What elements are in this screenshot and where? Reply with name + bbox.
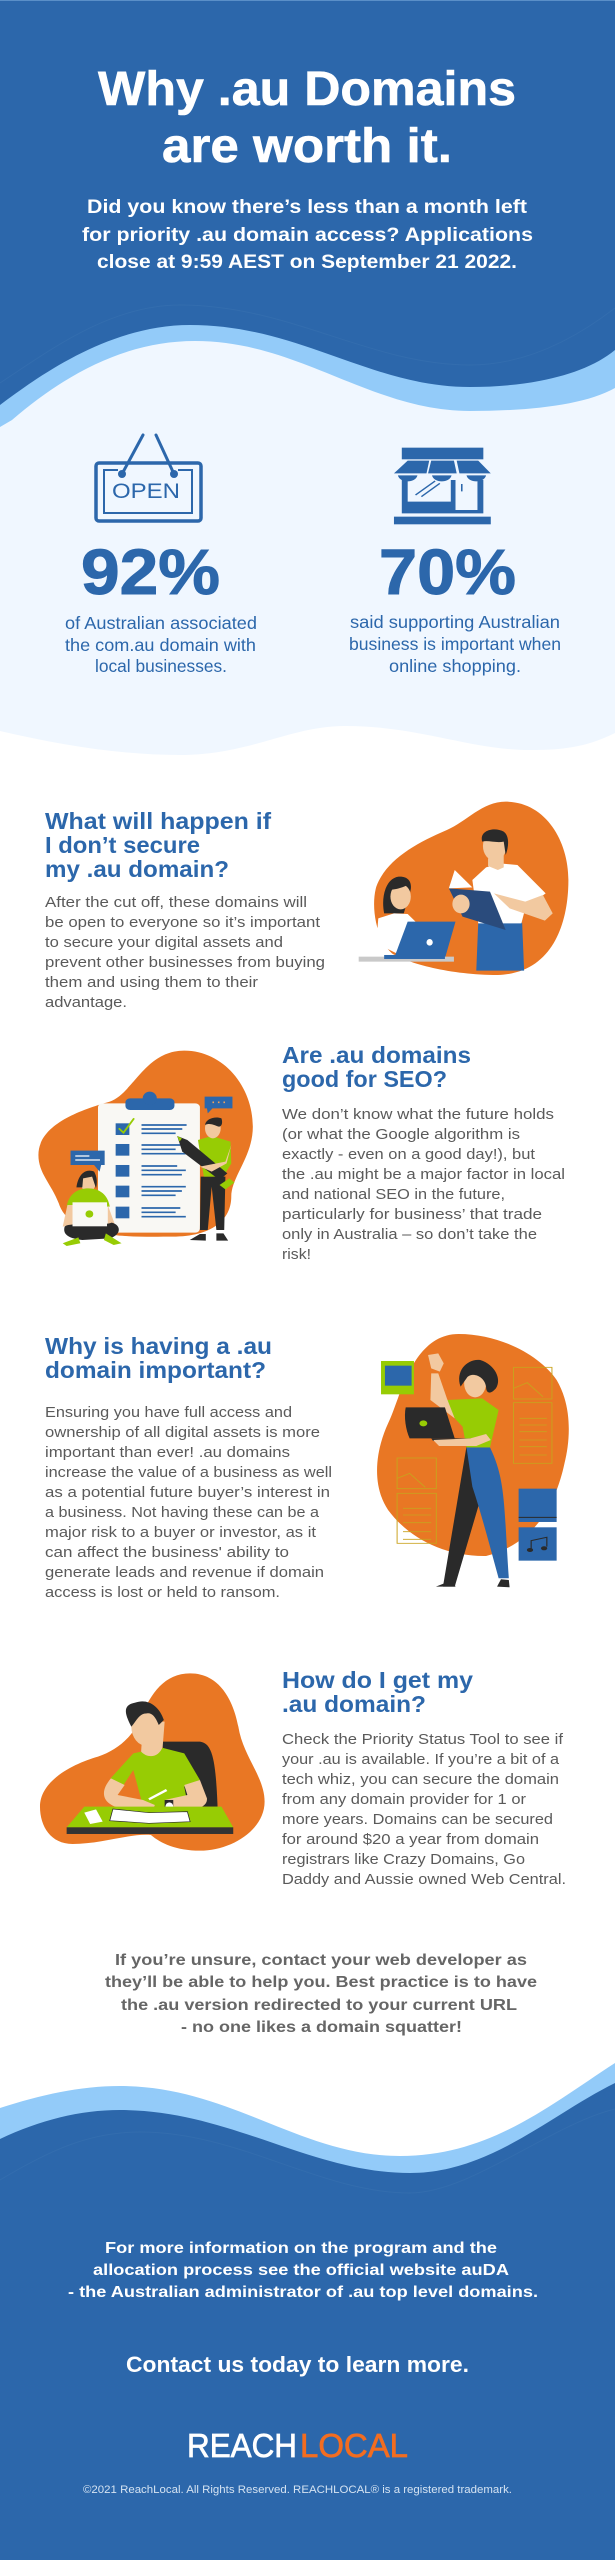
- body text: from any domain provider for 1 or: [282, 1791, 526, 1808]
- title: Why .au Domains: [98, 63, 516, 116]
- body text: generate leads and revenue if domain: [45, 1564, 324, 1581]
- stat description: online shopping.: [389, 656, 521, 676]
- body text: more years. Domains can be secured: [282, 1811, 553, 1828]
- copyright: ©2021 ReachLocal. All Rights Reserved. REACHLOCAL® is a registered trademark.: [83, 2484, 512, 2496]
- stat description: [65, 613, 257, 676]
- heading: I don’t secure: [45, 832, 200, 858]
- body text: and national SEO in the future,: [282, 1186, 505, 1203]
- footer information text: - the Australian administrator of .au top level domains.: [68, 2284, 538, 2301]
- body text: important than ever! .au domains: [45, 1444, 290, 1461]
- panel: stat 92%: [65, 435, 257, 676]
- intro text: for priority .au domain access? Applications: [82, 225, 533, 246]
- panel: footer background with waves: [0, 2063, 615, 2560]
- body text: Ensuring you have full access and: [45, 1404, 292, 1421]
- icon: open sign: OPEN: [112, 480, 180, 503]
- heading: good for SEO?: [282, 1066, 447, 1092]
- icon: shop front: [394, 448, 491, 524]
- logo: ReachLocal: LOCAL: [300, 2427, 408, 2464]
- body text: for around $20 a year from domain: [282, 1831, 539, 1848]
- body text: Check the Priority Status Tool to see if: [282, 1731, 564, 1748]
- body text: advantage.: [45, 994, 127, 1011]
- heading: [282, 1667, 473, 1717]
- callout text: the .au version redirected to your current URL: [121, 1997, 517, 2014]
- body text: your .au is available. If you’re a bit of a: [282, 1751, 560, 1768]
- stat number: 70%: [379, 536, 516, 608]
- body text: We don’t know what the future holds: [282, 1106, 554, 1123]
- panel: how do I get: [40, 1667, 566, 1888]
- body text: prevent other businesses from buying: [45, 954, 325, 971]
- body text: increase the value of a business as well: [45, 1464, 332, 1481]
- panel: stat 70%: [349, 448, 561, 676]
- body text: to secure your digital assets and: [45, 934, 283, 951]
- logo: ReachLocal: REACH: [187, 2427, 297, 2464]
- title: are worth it.: [162, 120, 452, 173]
- body text: [45, 1404, 332, 1601]
- footer information text: allocation process see the official website auDA: [93, 2262, 509, 2279]
- body text: as a potential future buyer’s interest in: [45, 1484, 330, 1501]
- heading: Are .au domains: [282, 1042, 471, 1068]
- body text: [45, 894, 325, 1011]
- panel: why important: [45, 1333, 569, 1601]
- body text: [282, 1106, 565, 1263]
- body text: be open to everyone so it’s important: [45, 914, 321, 931]
- illustration: man with book and woman with laptop: [359, 802, 568, 975]
- body text: ownership of all digital assets is more: [45, 1424, 320, 1441]
- logo: ReachLocal: [187, 2427, 408, 2464]
- footer information text: For more information on the program and the: [105, 2240, 497, 2257]
- body text: a business. Not having these can be a: [45, 1504, 320, 1521]
- stat description: said supporting Australian: [350, 612, 560, 632]
- body text: access is lost or held to ransom.: [45, 1584, 280, 1601]
- body text: tech whiz, you can secure the domain: [282, 1771, 559, 1788]
- illustration: man writing at desk: [40, 1673, 265, 1851]
- body text: exactly - even on a good day!), but: [282, 1146, 536, 1163]
- body text: only in Australia – so don’t take the: [282, 1226, 537, 1243]
- intro text: Did you know there’s less than a month left: [87, 197, 528, 218]
- title: [98, 63, 516, 173]
- icon: open sign: [96, 435, 201, 521]
- intro text: [82, 197, 533, 273]
- stat description: local businesses.: [95, 656, 227, 676]
- callout text: [105, 1952, 537, 2036]
- body text: major risk to a buyer or investor, as it: [45, 1524, 317, 1541]
- footer information text: [68, 2240, 538, 2301]
- panel: good for SEO: [38, 1042, 565, 1263]
- heading: .au domain?: [282, 1691, 426, 1717]
- stat description: [349, 612, 561, 676]
- body text: risk!: [282, 1246, 311, 1263]
- body text: them and using them to their: [45, 974, 258, 991]
- body text: can affect the business' ability to: [45, 1544, 289, 1561]
- heading: Why is having a .au: [45, 1333, 272, 1359]
- body text: (or what the Google algorithm is: [282, 1126, 520, 1143]
- body text: registrars like Crazy Domains, Go: [282, 1851, 525, 1868]
- body text: particularly for business’ that trade: [282, 1206, 542, 1223]
- body text: After the cut off, these domains will: [45, 894, 307, 911]
- callout text: If you’re unsure, contact your web developer as: [115, 1952, 527, 1969]
- stat description: of Australian associated: [65, 613, 257, 633]
- heading: domain important?: [45, 1357, 266, 1383]
- stat description: the com.au domain with: [65, 635, 256, 655]
- callout text: - no one likes a domain squatter!: [181, 2019, 462, 2036]
- body text: [282, 1731, 566, 1888]
- stat number: 92%: [81, 536, 220, 608]
- heading: [45, 1333, 272, 1383]
- panel: what will happen: [45, 802, 568, 1011]
- heading: my .au domain?: [45, 856, 229, 882]
- illustration: woman waving with laptop: [377, 1334, 569, 1587]
- heading: [45, 808, 271, 882]
- heading: How do I get my: [282, 1667, 473, 1693]
- heading: [282, 1042, 471, 1092]
- call to action: Contact us today to learn more.: [126, 2352, 469, 2377]
- intro text: close at 9:59 AEST on September 21 2022.: [97, 252, 517, 273]
- panel: hero background with waves: [0, 0, 615, 755]
- body text: the .au might be a major factor in local: [282, 1166, 565, 1183]
- body text: Daddy and Aussie owned Web Central.: [282, 1871, 566, 1888]
- callout text: they’ll be able to help you. Best practice is to have: [105, 1974, 537, 1991]
- stat description: business is important when: [349, 634, 561, 654]
- illustration: checklist with two people: [38, 1051, 253, 1246]
- heading: What will happen if: [45, 808, 271, 834]
